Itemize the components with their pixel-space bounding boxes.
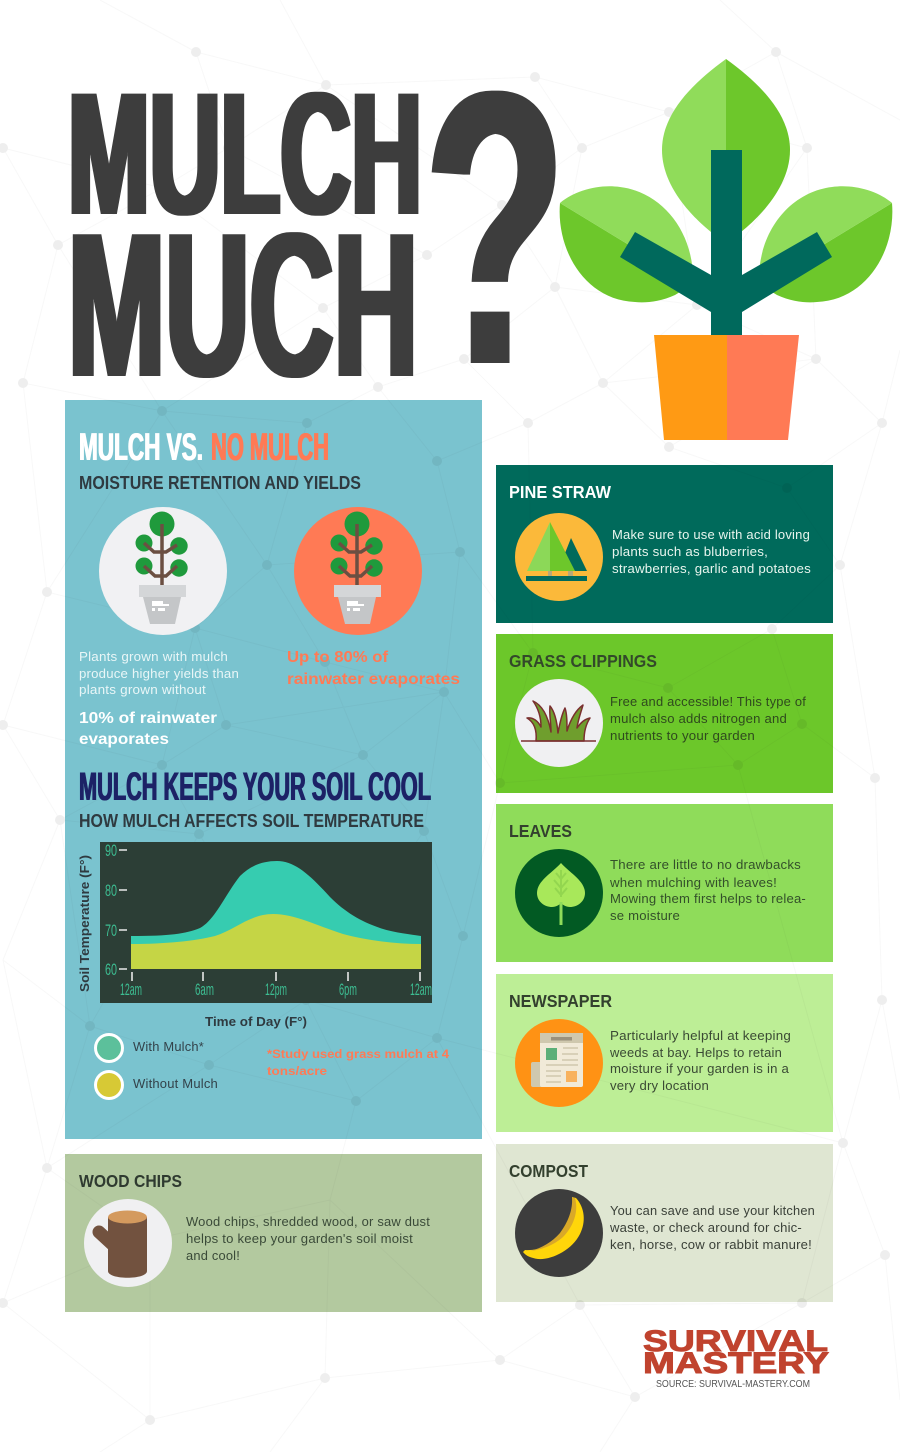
legend: without mulch: Without Mulch <box>133 1076 218 1091</box>
chart: soil temperature over time of day: 90 <box>105 841 117 860</box>
text: pine straw description: strawberries, garlic and potatoes <box>612 561 811 576</box>
chart: soil temperature over time of day: 6pm <box>339 980 357 999</box>
footnote: study details: tons/acre <box>267 1064 327 1078</box>
text: newspaper description <box>609 1028 791 1093</box>
icon: plant without mulch <box>294 507 422 635</box>
text: compost description <box>609 1203 815 1252</box>
icon: banana <box>515 1189 603 1277</box>
icon: pine trees <box>515 513 603 601</box>
title: Mulch Much? <box>68 10 566 446</box>
subheading: soil temperature: HOW MULCH AFFECTS SOIL TEMPERATURE <box>79 811 424 831</box>
logo: survival mastery: SURVIVAL <box>643 1325 828 1358</box>
text: mulch yields: produce higher yields than <box>79 666 239 681</box>
panel: compost <box>496 1144 833 1302</box>
text: leaves description: se moisture <box>610 908 680 923</box>
text: mulch yields: Plants grown with mulch <box>79 649 228 664</box>
text: mulch yields <box>79 649 239 697</box>
chart: soil temperature over time of day: 12pm <box>265 980 287 999</box>
stat: 10% of rainwater evaporates: evaporates <box>79 731 169 748</box>
text: grass clippings description: mulch also adds nitrogen and <box>610 711 787 726</box>
heading: compost: COMPOST <box>509 1161 588 1181</box>
legend: with mulch: With Mulch* <box>133 1039 204 1054</box>
text: wood chips description: Wood chips, shredded wood, or saw dust <box>186 1214 430 1229</box>
logo: survival mastery: MASTERY <box>643 1347 829 1380</box>
heading: pine straw: PINE STRAW <box>509 482 611 502</box>
panel: grass clippings <box>496 634 833 793</box>
chart: soil temperature over time of day: 6am <box>195 980 214 999</box>
panel: mulch vs no mulch and soil temperature <box>65 400 482 1139</box>
logo: survival mastery <box>643 1325 829 1390</box>
panel: newspaper <box>496 974 833 1132</box>
heading: wood chips: WOOD CHIPS <box>79 1171 182 1191</box>
text: newspaper description: moisture if your garden is in a <box>610 1061 790 1076</box>
icon: log <box>84 1199 172 1287</box>
text: leaves description: Mowing them first helps to relea- <box>610 891 806 906</box>
title: Mulch Much?: ? <box>424 10 566 446</box>
text: compost description: waste, or check around for chic- <box>609 1220 802 1235</box>
stat: up to 80% of rainwater evaporates: Up to 80% of <box>287 649 389 666</box>
text: grass clippings description: Free and accessible! This type of <box>610 694 806 709</box>
panel: pine straw <box>496 465 833 623</box>
stat: 10% of rainwater evaporates <box>79 710 217 748</box>
text: pine straw description: Make sure to use with acid loving <box>612 527 810 542</box>
subheading: moisture retention: MOISTURE RETENTION AND YIELDS <box>79 473 361 493</box>
heading: grass clippings: GRASS CLIPPINGS <box>509 651 657 671</box>
text: newspaper description: weeds at bay. Helps to retain <box>609 1045 782 1060</box>
text: compost description: ken, horse, cow or rabbit manure! <box>610 1237 812 1252</box>
stat: up to 80% of rainwater evaporates: rainwater evaporates <box>287 671 460 688</box>
text: mulch yields: plants grown without <box>79 682 206 697</box>
text: pine straw description <box>612 527 811 576</box>
text: leaves description: There are little to no drawbacks <box>610 857 801 872</box>
chart: soil temperature over time of day <box>100 841 432 1003</box>
text: wood chips description: helps to keep your garden's soil moist <box>186 1231 413 1246</box>
title: Mulch Much?: MUCH <box>68 190 418 420</box>
footnote: study details <box>267 1047 449 1078</box>
text: grass clippings description: nutrients to your garden <box>610 728 755 743</box>
text: leaves description: when mulching with leaves! <box>609 875 777 890</box>
stat: up to 80% of rainwater evaporates <box>287 649 460 688</box>
legend: without mulch <box>96 1072 218 1098</box>
heading: leaves: LEAVES <box>509 821 572 841</box>
chart: soil temperature over time of day: 60 <box>105 960 117 979</box>
panel: wood chips <box>65 1154 482 1312</box>
icon: newspaper <box>515 1019 603 1107</box>
stat: 10% of rainwater evaporates: 10% of rainwater <box>79 710 217 727</box>
chart: soil temperature over time of day: 80 <box>105 881 117 900</box>
icon: leaf <box>515 849 603 937</box>
chart: soil temperature over time of day: 12am <box>410 980 432 999</box>
heading: newspaper: NEWSPAPER <box>509 991 612 1011</box>
axis label: soil temperature: Soil Temperature (F°) <box>77 855 92 992</box>
text: wood chips description <box>186 1214 430 1263</box>
chart: soil temperature over time of day: 12am <box>120 980 142 999</box>
heading: mulch vs no mulch: MULCH VS. <box>79 426 203 469</box>
heading: mulch vs no mulch: NO MULCH <box>211 426 329 469</box>
icon: grass <box>515 679 603 767</box>
text: newspaper description: Particularly helpful at keeping <box>610 1028 791 1043</box>
axis label: time of day: Time of Day (F°) <box>205 1014 307 1029</box>
heading: mulch keeps your soil cool: MULCH KEEPS YOUR SOIL COOL <box>79 765 431 809</box>
source line: SOURCE: SURVIVAL-MASTERY.COM <box>656 1379 810 1390</box>
legend: with mulch <box>96 1034 204 1062</box>
chart: soil temperature over time of day: 70 <box>105 921 117 940</box>
text: wood chips description: and cool! <box>186 1248 240 1263</box>
text: grass clippings description <box>610 694 806 743</box>
illustration: potted plant <box>560 59 892 440</box>
text: pine straw description: plants such as bluberries, <box>612 544 768 559</box>
text: compost description: You can save and use your kitchen <box>610 1203 815 1218</box>
panel: leaves <box>496 804 833 962</box>
text: newspaper description: very dry location <box>610 1078 709 1093</box>
text: leaves description <box>609 857 806 923</box>
icon: plant with mulch <box>99 507 227 635</box>
title: Mulch Much?: MULCH <box>68 57 422 252</box>
footnote: study details: *Study used grass mulch at 4 <box>267 1047 449 1061</box>
